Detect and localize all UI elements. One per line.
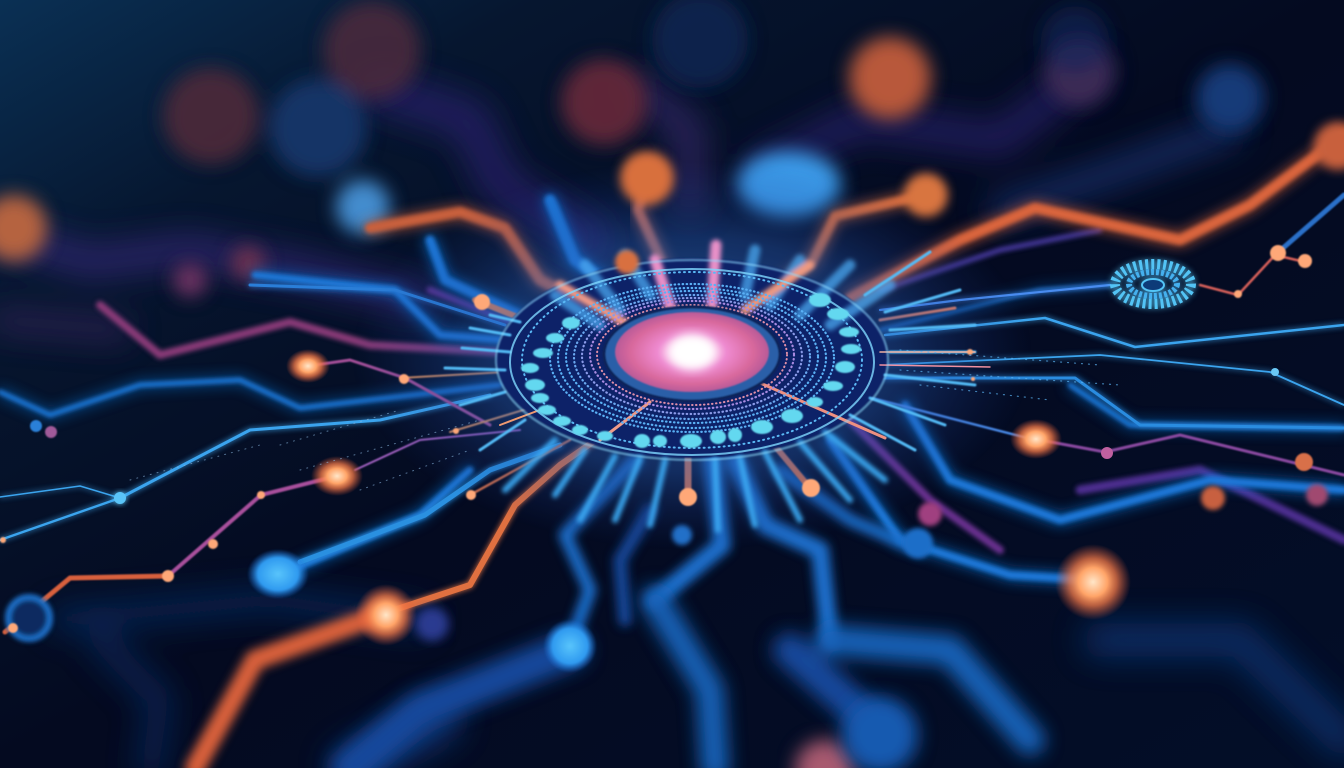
thick blurred upper spokes [555, 245, 890, 326]
small muted nodes [415, 447, 1328, 768]
tiny bright dots [0, 245, 1312, 633]
hub: rim [604, 307, 780, 401]
node: left blue oval [247, 549, 309, 599]
circuit hub [496, 260, 888, 460]
large foreground traces at bottom: out of focus blue [350, 600, 1030, 768]
glowing blue nodes [8, 368, 1279, 673]
orange trace: upper right [850, 135, 1344, 298]
node: small left blue [114, 492, 126, 504]
bokeh: top orange and red circles [0, 1, 1113, 297]
bokeh lights [0, 0, 1264, 297]
node: far left ring [8, 597, 50, 639]
central halo [352, 160, 1032, 550]
radial spokes lower [505, 432, 885, 530]
orange trace: upper left [370, 212, 630, 326]
glowing orange nodes [286, 122, 1344, 646]
large foreground traces near hub: blue [565, 455, 920, 645]
radial spokes upper and side [445, 252, 975, 450]
node: gear rosette [1115, 264, 1191, 304]
orange trace: upper centre right [745, 195, 925, 310]
node: small top orange [615, 250, 639, 274]
orange trace: upper centre [638, 178, 678, 310]
node: lower left [355, 584, 417, 646]
hub: white centre glow [668, 334, 716, 370]
orange and purple trace: left [5, 476, 337, 632]
node: lower right large [1055, 544, 1131, 620]
node: right centre [1010, 419, 1062, 459]
node: left lower patterned [311, 456, 363, 496]
hub: ring of capsule lights [521, 293, 861, 448]
mid blurred traces: purple [100, 230, 1344, 550]
node: left upper [286, 349, 330, 383]
node: top orange [620, 151, 674, 205]
sharp blue traces [0, 285, 1344, 562]
mid blurred traces: blue [0, 200, 1344, 580]
node: small right orange [1295, 453, 1313, 471]
hub: dotted particle rings [496, 260, 888, 460]
node: far right orange [1314, 122, 1344, 170]
bokeh: top blue circles [269, 0, 1264, 234]
particle dust: right [900, 350, 1120, 400]
node: top right orange [904, 173, 948, 217]
node: bottom blue [543, 619, 597, 673]
particle dust: left [130, 410, 480, 490]
hub: pink core [615, 312, 769, 392]
pink and orange accent spokes [500, 352, 990, 440]
orange trace: lower left large [195, 402, 650, 768]
hub base disc [496, 258, 888, 458]
thin purple and orange traces [308, 195, 1344, 495]
